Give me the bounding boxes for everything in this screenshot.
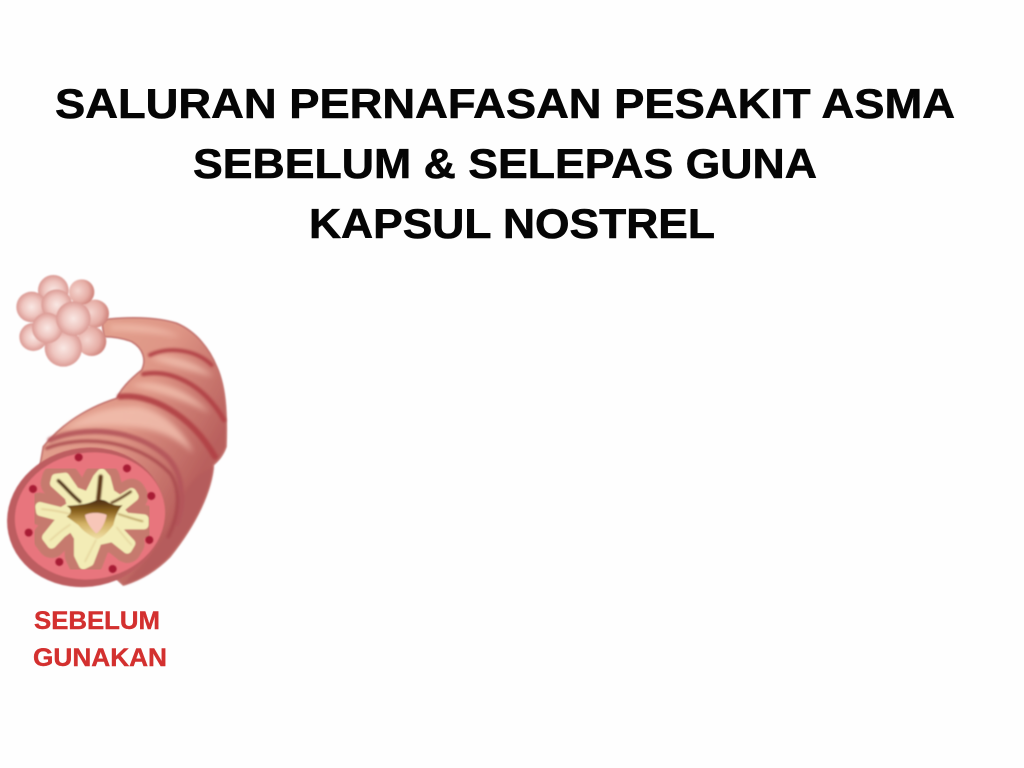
cross-section rim bbox=[0, 433, 178, 602]
label: sebelum gunakan bbox=[33, 607, 167, 672]
title: SEBELUM & SELEPAS GUNA bbox=[193, 140, 817, 187]
illustration: airway bronchus with alveoli bbox=[0, 275, 226, 602]
alveoli cluster bbox=[16, 275, 109, 367]
title: SALURAN PERNAFASAN PESAKIT ASMA bbox=[55, 80, 955, 127]
airway cross-section: inflamed folded lining bbox=[40, 473, 144, 565]
blood vessels bbox=[25, 453, 155, 573]
title bbox=[55, 80, 955, 247]
label: sebelum gunakan: SEBELUM bbox=[34, 607, 160, 635]
swollen muscle layer bbox=[40, 473, 144, 565]
title: KAPSUL NOSTREL bbox=[309, 200, 715, 247]
highlight bands bbox=[63, 406, 193, 453]
lumen channels bbox=[42, 477, 143, 562]
dark outer shading bbox=[123, 467, 213, 585]
label: sebelum gunakan: GUNAKAN bbox=[33, 644, 167, 672]
tube ridges bbox=[47, 350, 224, 537]
tube body bbox=[0, 318, 226, 602]
mucus band bbox=[40, 473, 144, 565]
narrowed lumen bbox=[67, 500, 123, 539]
